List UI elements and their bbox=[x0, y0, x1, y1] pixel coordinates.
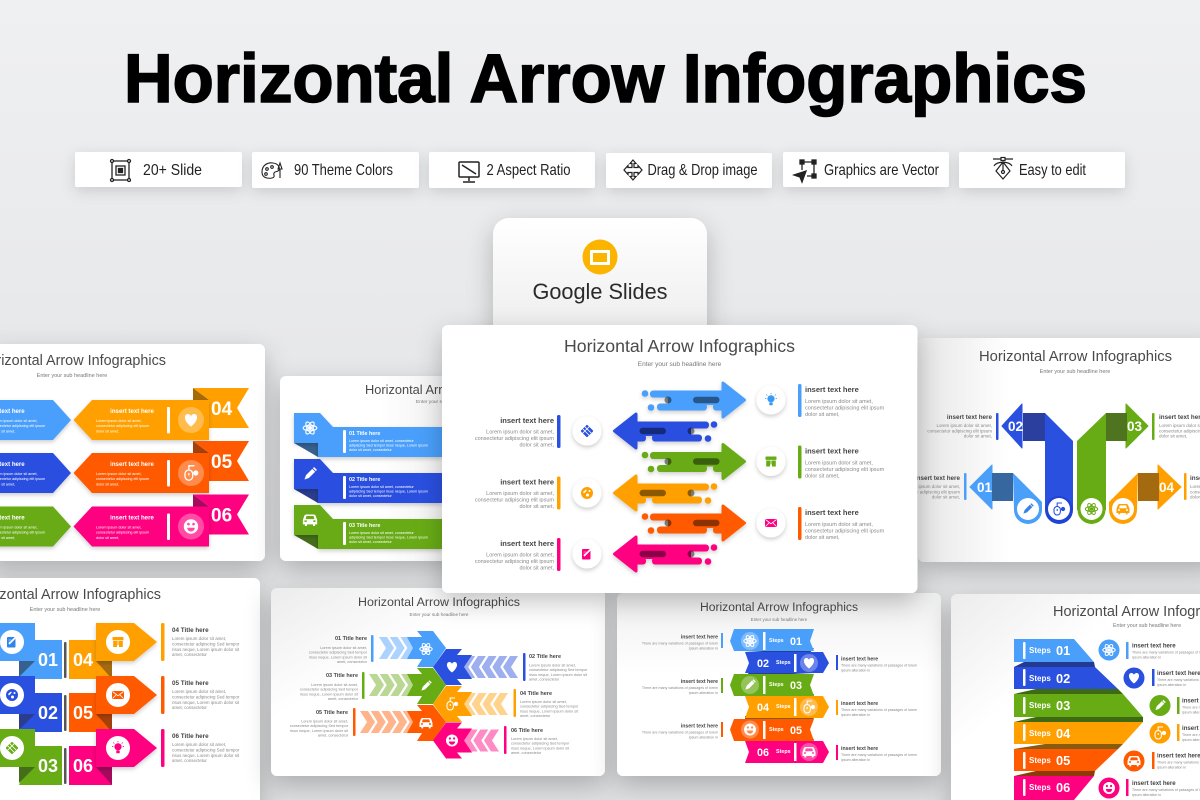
label: Google Slides: Google Slides bbox=[532, 279, 668, 304]
ribbon 06: consectetur adipiscing elit ipsum bbox=[96, 531, 149, 535]
text 01: 01 Title here bbox=[335, 636, 367, 642]
text 06 bbox=[504, 726, 570, 755]
ribbon 02: adipiscing Sed tempor risus neque, Lorem ipsum bbox=[349, 490, 428, 494]
step 01: Steps bbox=[1029, 646, 1051, 655]
arrow 01 bbox=[970, 465, 1042, 524]
step 02 bbox=[745, 652, 829, 673]
text 04: 04 Title here bbox=[520, 691, 552, 697]
text: right 1: consectetur adipiscing elit ipsum bbox=[805, 406, 885, 412]
arrow: red-orange right bbox=[642, 506, 744, 540]
row 02 and 05: consectetur adipiscing Sed tempor bbox=[172, 694, 240, 699]
pill: 20+ slide: 20+ Slide bbox=[143, 162, 202, 179]
step 02: 02 bbox=[757, 658, 769, 670]
ribbon 06: insert text here bbox=[110, 514, 154, 522]
arrow: green right bbox=[642, 444, 744, 478]
step 01: Steps bbox=[769, 638, 784, 644]
row 03 and 06: risus neque, Lorem ipsum dolor sit bbox=[172, 753, 240, 758]
right text blocks: There are many variations of passages of lorem bbox=[841, 753, 917, 757]
text: 01: consectetur adipiscing elit ipsum bbox=[895, 489, 960, 494]
ribbon 03: 03 Title here bbox=[349, 523, 380, 529]
text 06: risus neque, Lorem ipsum dolor sit bbox=[511, 746, 570, 750]
row 01 and 04: 04 bbox=[73, 650, 93, 670]
step texts bbox=[1126, 642, 1200, 797]
text 05: Lorem ipsum dolor sit amet, bbox=[301, 720, 348, 724]
icon: Google Slides logo bbox=[582, 240, 618, 274]
ribbon 01: adipiscing Sed tempor risus neque, Lorem ipsum bbox=[349, 444, 428, 448]
step 03: 03 bbox=[790, 680, 802, 692]
panel: main center slide bbox=[442, 325, 918, 593]
step 05: 05 bbox=[790, 725, 802, 737]
text 04: risus neque, Lorem ipsum dolor sit bbox=[520, 709, 579, 713]
step 06 bbox=[1014, 776, 1094, 800]
arrow 01: 01 bbox=[977, 480, 993, 495]
text: right 1 bbox=[798, 384, 885, 418]
arrow 03: 03 bbox=[1127, 419, 1143, 434]
text: right 2 bbox=[798, 446, 885, 480]
text 06: 06 Title here bbox=[511, 728, 543, 734]
text: right 3 bbox=[798, 507, 885, 541]
ribbon 04 bbox=[74, 388, 249, 440]
icon: note bbox=[572, 540, 602, 568]
text 04: consectetur adipiscing Sed tempor bbox=[520, 705, 579, 709]
arrow 01 bbox=[407, 631, 446, 667]
pill: drag and drop bbox=[606, 153, 772, 188]
row 02 and 05: 02 bbox=[38, 703, 58, 723]
ribbon 05 bbox=[74, 441, 249, 493]
text: right 3: dolor sit amet, bbox=[805, 535, 840, 541]
arrow 03 bbox=[1077, 404, 1148, 524]
text: right 3: Lorem ipsum dolor sit amet, bbox=[805, 522, 873, 528]
panel: slide bottom right bbox=[951, 594, 1200, 800]
text: left 1: insert text here bbox=[500, 416, 554, 425]
left text blocks: insert text here bbox=[681, 634, 718, 640]
right text blocks: There are many variations of passages of lorem bbox=[841, 708, 917, 712]
arrow 02 bbox=[433, 649, 472, 685]
left text blocks: ipsum alteration in bbox=[689, 691, 718, 695]
panel: slide top left: Enter your sub headline here bbox=[37, 373, 107, 379]
row 01 and 04: Lorem ipsum dolor sit amet, bbox=[172, 636, 226, 641]
step 04: 04 bbox=[1056, 726, 1071, 741]
text 05: amet, consectetur bbox=[318, 734, 349, 738]
icon: globe bbox=[572, 478, 602, 508]
step 06 bbox=[745, 741, 829, 763]
row 03 and 06: amet, consectetur bbox=[172, 758, 207, 763]
row 03 and 06: 03 bbox=[38, 756, 58, 776]
text: left 1: dolor sit amet, bbox=[519, 442, 554, 448]
text: 02: insert text here bbox=[947, 414, 992, 421]
right text blocks: insert text here bbox=[841, 656, 878, 662]
text 01: risus neque, Lorem ipsum dolor sit bbox=[309, 655, 368, 659]
row 01 and 04 bbox=[0, 623, 240, 679]
text 05: 05 Title here bbox=[316, 710, 348, 716]
right text blocks: There are many variations of passages of lorem bbox=[841, 664, 917, 668]
ribbon 05: dolor sit amet, bbox=[96, 482, 119, 486]
panel: slide bottom left: Enter your sub headline here bbox=[30, 607, 100, 613]
ribbon 02 bbox=[294, 459, 442, 503]
ribbon 06: Lorem ipsum dolor sit amet, bbox=[96, 526, 142, 530]
text: 01: dolor sit amet, bbox=[932, 495, 960, 500]
text: 01: Lorem ipsum dolor sit amet, bbox=[904, 484, 960, 489]
ribbon 02: dolor sit amet, consectetur bbox=[349, 494, 392, 498]
step 03 bbox=[730, 674, 814, 696]
step texts: ipsum alteration in bbox=[1132, 656, 1161, 660]
feature pills row bbox=[75, 152, 1125, 188]
text 04: Lorem ipsum dolor sit amet, bbox=[520, 700, 567, 704]
step texts: insert text here bbox=[1132, 780, 1176, 787]
step 02 bbox=[1014, 667, 1118, 689]
row 03 and 06: consectetur adipiscing Sed tempor bbox=[172, 747, 240, 752]
row 01 and 04: 01 bbox=[38, 650, 58, 670]
ribbon 06: dolor sit amet, bbox=[96, 536, 119, 540]
step 04 bbox=[745, 696, 829, 718]
text: left 1 bbox=[475, 415, 560, 448]
text: left 3 bbox=[475, 538, 560, 572]
text 02: risus neque, Lorem ipsum dolor sit bbox=[529, 673, 588, 677]
step 03 bbox=[1014, 694, 1143, 717]
panel: slide bottom second: Horizontal Arrow Infographics bbox=[358, 595, 520, 609]
icon: gift bbox=[756, 447, 786, 476]
text 05: risus neque, Lorem ipsum dolor sit bbox=[290, 729, 349, 733]
ribbon 01: Lorem ipsum dolor sit amet, consectetur bbox=[349, 439, 415, 443]
text 06: consectetur adipiscing Sed tempor bbox=[511, 742, 570, 746]
dark ribbon folds bbox=[745, 648, 814, 746]
panel: slide top right: Horizontal Arrow Infographics bbox=[979, 349, 1172, 365]
text 03: consectetur adipiscing Sed tempor bbox=[300, 688, 359, 692]
ribbon 05: Lorem ipsum dolor sit amet, bbox=[96, 472, 142, 476]
ribbon 02: Lorem ipsum dolor sit amet, consectetur bbox=[349, 485, 415, 489]
panel: slide top right: Enter your sub headline here bbox=[1040, 369, 1110, 375]
arrow 05 bbox=[407, 705, 446, 741]
step texts: insert text here bbox=[1157, 670, 1200, 677]
ribbon 04: consectetur adipiscing elit ipsum bbox=[96, 424, 149, 428]
row 01 and 04: risus neque, Lorem ipsum dolor sit bbox=[172, 647, 240, 652]
left text blocks: There are many variations of passages of lorem bbox=[642, 686, 718, 690]
left text blocks: There are many variations of passages of lorem bbox=[642, 730, 718, 734]
text 01: amet, consectetur bbox=[337, 660, 368, 664]
step 01: 01 bbox=[1056, 643, 1070, 658]
center heading: Horizontal Arrow Infographics bbox=[564, 336, 795, 356]
right text blocks: ipsum alteration in bbox=[841, 713, 870, 717]
ribbon 04: dolor sit amet, bbox=[96, 429, 119, 433]
text: left 2 bbox=[475, 476, 560, 510]
step 05: Steps bbox=[1029, 756, 1051, 765]
text: 04 bbox=[1184, 473, 1200, 500]
text 03: 03 Title here bbox=[326, 673, 358, 679]
right text blocks: insert text here bbox=[841, 746, 878, 752]
icon: handshake bbox=[572, 416, 602, 446]
text: left 2: dolor sit amet, bbox=[519, 504, 554, 510]
text 04 bbox=[514, 689, 579, 718]
pill: 90 theme colors: 90 Theme Colors bbox=[294, 162, 393, 179]
panel: slide bottom third: Enter your sub headline here bbox=[751, 617, 808, 622]
left text blocks: insert text here bbox=[681, 679, 718, 685]
title: Horizontal Arrow Infographics bbox=[124, 40, 1087, 117]
row 01 and 04: amet, consectetur bbox=[172, 652, 207, 657]
text 06: Lorem ipsum dolor sit amet, bbox=[511, 737, 558, 741]
left text blocks: ipsum alteration in bbox=[689, 646, 718, 650]
ribbon 04: insert text here bbox=[110, 408, 154, 415]
text 02: amet, consectetur bbox=[529, 678, 560, 682]
Google Slides card bbox=[493, 218, 707, 343]
left text blocks: There are many variations of passages of lorem bbox=[642, 642, 718, 646]
text: right 3: consectetur adipiscing elit ipsum bbox=[805, 528, 885, 534]
right text blocks: ipsum alteration in bbox=[841, 668, 870, 672]
ribbon 02: 02 Title here bbox=[349, 477, 380, 483]
row 02 and 05: amet, consectetur bbox=[172, 705, 207, 710]
left arrow rows bbox=[0, 400, 71, 546]
text 03: risus neque, Lorem ipsum dolor sit bbox=[300, 692, 359, 696]
text: right 1: dolor sit amet, bbox=[805, 412, 840, 418]
row 02 and 05: risus neque, Lorem ipsum dolor sit bbox=[172, 700, 240, 705]
panel: slide bottom second bbox=[271, 588, 605, 776]
step 04: Steps bbox=[776, 704, 791, 710]
text 02 bbox=[523, 653, 588, 682]
text: left 2: insert text here bbox=[500, 478, 554, 486]
arrow 04 bbox=[433, 686, 472, 722]
text 05 bbox=[290, 708, 356, 738]
text 01: Lorem ipsum dolor sit amet, bbox=[320, 646, 367, 650]
arrow: pink left bbox=[614, 537, 717, 571]
arrow 02: 02 bbox=[1008, 419, 1023, 434]
right text blocks bbox=[836, 655, 917, 762]
ribbon 03 bbox=[294, 505, 442, 549]
right text blocks: insert text here bbox=[841, 701, 878, 707]
pill: easy to edit: Easy to edit bbox=[1019, 162, 1086, 179]
step icons bbox=[1098, 640, 1170, 798]
row 02 and 05 bbox=[0, 676, 240, 732]
step 04 bbox=[1014, 722, 1143, 744]
step 02: Steps bbox=[1029, 674, 1051, 683]
left text blocks bbox=[642, 633, 723, 740]
row 03 and 06: Lorem ipsum dolor sit amet, bbox=[172, 742, 226, 747]
step texts: ipsum alteration in bbox=[1157, 683, 1186, 687]
ribbon 04: Lorem ipsum dolor sit amet, bbox=[96, 419, 142, 423]
ribbon 06: 06 bbox=[211, 506, 232, 526]
text: 02: Lorem ipsum dolor sit amet, bbox=[936, 423, 992, 428]
text: 03: dolor sit amet, bbox=[1159, 434, 1187, 439]
arrow 04: 04 bbox=[1159, 480, 1175, 495]
center subheading: Enter your sub headline here bbox=[638, 361, 722, 368]
panel: slide top right bbox=[895, 338, 1200, 562]
pill: drag and drop: Drag & Drop image bbox=[648, 162, 758, 179]
left text blocks: ipsum alteration in bbox=[689, 736, 718, 740]
text 02: Lorem ipsum dolor sit amet, bbox=[529, 664, 576, 668]
text: right 2: Lorem ipsum dolor sit amet, bbox=[805, 460, 873, 466]
panel: slide bottom third: Horizontal Arrow Infographics bbox=[700, 600, 858, 614]
arrow: orange left bbox=[614, 476, 717, 510]
step 01: 01 bbox=[790, 636, 802, 648]
row 02 and 05: 05 bbox=[73, 703, 93, 723]
panel: slide top left bbox=[0, 344, 265, 561]
ribbon 04: 04 bbox=[211, 399, 233, 420]
text 05: consectetur adipiscing Sed tempor bbox=[290, 724, 349, 728]
text: right 1: insert text here bbox=[805, 385, 859, 394]
step 02: 02 bbox=[1056, 671, 1070, 686]
arrow 02 bbox=[1002, 404, 1073, 524]
ribbon 03: dolor sit amet, consectetur bbox=[349, 540, 392, 544]
step 04: Steps bbox=[1029, 729, 1051, 738]
step 03: Steps bbox=[769, 682, 784, 688]
arrow 04 bbox=[1109, 465, 1181, 524]
step 05 bbox=[730, 719, 814, 741]
text: right 2: consectetur adipiscing elit ipsum bbox=[805, 467, 885, 473]
text: 01: insert text here bbox=[915, 475, 960, 482]
ribbon 01 bbox=[294, 413, 442, 457]
ribbon 01: 01 Title here bbox=[349, 431, 380, 437]
pill: 20+ slide bbox=[75, 152, 242, 187]
step 05 bbox=[1014, 749, 1118, 771]
panel: slide bottom third bbox=[617, 593, 941, 776]
text 04: amet, consectetur bbox=[520, 714, 551, 718]
pill: easy to edit bbox=[959, 152, 1125, 188]
step 03: Steps bbox=[1029, 701, 1051, 710]
pill: 2 aspect ratio: 2 Aspect Ratio bbox=[486, 162, 571, 179]
text: 01 bbox=[895, 473, 966, 500]
dark folds bbox=[1014, 662, 1143, 776]
step 01 bbox=[1014, 639, 1094, 662]
text 03 bbox=[300, 672, 364, 701]
pill: 2 aspect ratio bbox=[429, 152, 595, 188]
step texts: insert text here bbox=[1132, 642, 1176, 650]
step 06: 06 bbox=[1056, 780, 1070, 795]
text: right 3: insert text here bbox=[805, 508, 859, 517]
pill: 90 theme colors bbox=[252, 152, 419, 188]
step texts: insert text here bbox=[1157, 752, 1200, 760]
icon: mail bbox=[756, 508, 786, 538]
arrow: blue right bbox=[642, 383, 744, 417]
row 03 and 06: 06 bbox=[73, 756, 93, 776]
row 01 and 04: consectetur adipiscing Sed tempor bbox=[172, 641, 240, 646]
ribbon 05: 05 bbox=[211, 452, 233, 473]
text 02: 02 Title here bbox=[529, 654, 561, 660]
step 06: Steps bbox=[1029, 783, 1051, 792]
pill: graphics are vector bbox=[783, 152, 949, 187]
step 02: Steps bbox=[776, 660, 791, 666]
row 02 and 05: Lorem ipsum dolor sit amet, bbox=[172, 689, 226, 694]
panel: slide top second: Horizontal Arrow Infographics bbox=[365, 382, 532, 397]
text 03: Lorem ipsum dolor sit amet, bbox=[311, 683, 358, 687]
step 03: 03 bbox=[1056, 698, 1070, 713]
row 02 and 05: 05 Title here bbox=[172, 680, 209, 687]
step 01 bbox=[730, 629, 814, 651]
step texts: ipsum alteration in bbox=[1132, 793, 1161, 797]
text: 02: dolor sit amet, bbox=[964, 434, 992, 439]
step 05: Steps bbox=[769, 727, 784, 733]
ribbon 03: adipiscing Sed tempor risus neque, Lorem ipsum bbox=[349, 536, 428, 540]
text: left 2: consectetur adipiscing elit ipsum bbox=[475, 498, 554, 504]
text: left 3: consectetur adipiscing elit ipsum bbox=[475, 559, 554, 565]
text 01: consectetur adipiscing Sed tempor bbox=[309, 651, 368, 655]
chevrons bbox=[360, 637, 518, 752]
step 06: 06 bbox=[757, 747, 769, 759]
text: left 2: Lorem ipsum dolor sit amet, bbox=[486, 491, 554, 497]
text: right 2: dolor sit amet, bbox=[805, 474, 840, 480]
panel: slide top second bbox=[280, 376, 532, 561]
text: right 2: insert text here bbox=[805, 446, 859, 456]
arrow: dark blue left bbox=[614, 414, 717, 448]
right text blocks: ipsum alteration in bbox=[841, 758, 870, 762]
ribbon 05: consectetur adipiscing elit ipsum bbox=[96, 477, 149, 481]
step texts: ipsum alteration in bbox=[1157, 766, 1186, 770]
text 03: amet, consectetur bbox=[328, 697, 359, 701]
text: 03 bbox=[1152, 413, 1200, 440]
arrow 03 bbox=[407, 668, 446, 704]
ribbon 01: dolor sit amet, consectetur bbox=[349, 448, 392, 452]
row 01 and 04: 04 Title here bbox=[172, 627, 209, 634]
text: left 3: insert text here bbox=[500, 539, 554, 548]
text: left 3: Lorem ipsum dolor sit amet, bbox=[486, 552, 554, 558]
ribbon 05: insert text here bbox=[110, 461, 154, 468]
panel: slide bottom left bbox=[0, 578, 260, 800]
text 06: amet, consectetur bbox=[511, 751, 542, 755]
panel: slide bottom right: Enter your sub headline here bbox=[1113, 623, 1181, 629]
text: right 1: Lorem ipsum dolor sit amet, bbox=[805, 399, 873, 405]
pill: graphics are vector: Graphics are Vector bbox=[824, 162, 940, 179]
text: left 3: dolor sit amet, bbox=[519, 566, 554, 572]
ribbon 03: Lorem ipsum dolor sit amet, consectetur bbox=[349, 531, 415, 535]
row 03 and 06 bbox=[0, 729, 240, 785]
step 04: 04 bbox=[757, 702, 769, 714]
text: left 1: consectetur adipiscing elit ipsum bbox=[475, 436, 554, 442]
panel: slide bottom second: Enter your sub headline here bbox=[410, 612, 469, 617]
ribbon 06 bbox=[74, 494, 249, 546]
arrow 06 bbox=[433, 722, 472, 758]
panel: slide top second: Enter your sub headline here bbox=[416, 399, 478, 405]
left text blocks: insert text here bbox=[681, 724, 718, 730]
text 01 bbox=[309, 635, 374, 664]
icon: bulb bbox=[756, 386, 786, 414]
text: left 1: Lorem ipsum dolor sit amet, bbox=[486, 430, 554, 436]
text: 02: consectetur adipiscing elit ipsum bbox=[927, 428, 992, 433]
text 02: consectetur adipiscing Sed tempor bbox=[529, 668, 588, 672]
step 06: Steps bbox=[776, 749, 791, 755]
text: 02 bbox=[927, 413, 998, 440]
row 03 and 06: 06 Title here bbox=[172, 733, 209, 740]
step 05: 05 bbox=[1056, 753, 1070, 768]
